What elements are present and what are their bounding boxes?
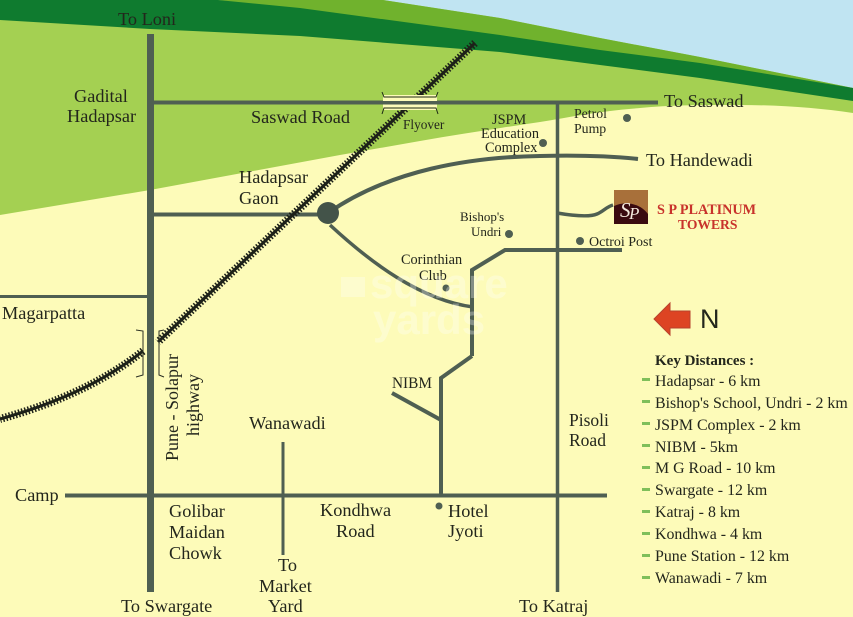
highway label: highway bbox=[183, 374, 203, 436]
place labels: Jyoti bbox=[448, 521, 484, 541]
place labels: Yard bbox=[268, 596, 303, 616]
road network bbox=[0, 34, 658, 592]
key distances list: JSPM Complex - 2 km bbox=[655, 417, 801, 434]
project name bbox=[657, 202, 756, 232]
key distances list: NIBM - 5km bbox=[655, 439, 739, 456]
key distances heading: Key Distances : bbox=[655, 353, 754, 369]
key distances list: Kondhwa - 4 km bbox=[655, 526, 763, 543]
junction: Hadapsar Gaon bbox=[317, 202, 339, 224]
place labels: Gaon bbox=[239, 188, 279, 208]
place labels: To bbox=[278, 555, 297, 575]
place labels: To Handewadi bbox=[646, 150, 753, 170]
place labels: Market bbox=[259, 576, 312, 596]
place labels: To Katraj bbox=[519, 596, 588, 616]
place labels: To Loni bbox=[118, 9, 176, 29]
small landmark labels: NIBM bbox=[392, 375, 432, 392]
watermark bbox=[341, 260, 508, 343]
place labels: Hadapsar bbox=[239, 167, 308, 187]
background: sky bbox=[383, 0, 853, 88]
key distances list: Katraj - 8 km bbox=[655, 504, 741, 521]
place labels: To Saswad bbox=[664, 91, 743, 111]
small landmark labels: Education bbox=[481, 126, 539, 142]
place labels: Magarpatta bbox=[2, 303, 85, 323]
small landmark labels: Corinthian bbox=[401, 252, 462, 268]
place labels: Wanawadi bbox=[249, 413, 326, 433]
small landmark labels: Petrol bbox=[574, 106, 607, 121]
watermark: square bbox=[370, 260, 508, 307]
logo: S P Platinum bbox=[614, 190, 648, 224]
place labels: Road bbox=[569, 430, 606, 450]
place labels: Gadital bbox=[74, 86, 128, 106]
north arrow: N bbox=[700, 304, 720, 334]
place labels: Hotel bbox=[448, 501, 489, 521]
key distances list bbox=[655, 373, 848, 587]
small landmark labels: Octroi Post bbox=[589, 235, 652, 250]
highway label bbox=[162, 354, 203, 461]
place labels: To Swargate bbox=[121, 596, 212, 616]
background: mid green strip bbox=[218, 0, 853, 95]
key distances list: M G Road - 10 km bbox=[655, 460, 776, 477]
background: dark green band bbox=[0, 0, 853, 101]
small landmark labels bbox=[392, 106, 652, 392]
place labels: Camp bbox=[15, 485, 59, 505]
place labels: Saswad Road bbox=[251, 107, 350, 127]
background: light green hill bbox=[0, 0, 853, 215]
small landmark labels: Bishop's bbox=[460, 209, 504, 224]
place labels: Maidan bbox=[169, 522, 225, 542]
place labels: Hadapsar bbox=[67, 106, 136, 126]
small landmark labels: Undri bbox=[471, 224, 502, 239]
key distances list: Wanawadi - 7 km bbox=[655, 570, 768, 587]
logo: S P Platinum: P bbox=[628, 204, 639, 223]
rail underpass brackets bbox=[136, 330, 164, 377]
list bullets bbox=[642, 378, 650, 579]
place labels: Golibar bbox=[169, 501, 225, 521]
place labels: Pisoli bbox=[569, 410, 609, 430]
watermark: yards bbox=[373, 296, 485, 343]
railway line bbox=[0, 43, 475, 419]
flyover bbox=[382, 92, 438, 114]
key distances list: Hadapsar - 6 km bbox=[655, 373, 761, 390]
key distances panel bbox=[642, 353, 848, 587]
small landmark labels: JSPM bbox=[492, 112, 526, 128]
small landmark labels: Pump bbox=[574, 121, 606, 136]
key distances list: Pune Station - 12 km bbox=[655, 548, 790, 565]
small landmark labels: Club bbox=[419, 268, 447, 284]
place labels: Road bbox=[336, 521, 375, 541]
project name: TOWERS bbox=[678, 217, 737, 232]
place labels: Kondhwa bbox=[320, 500, 391, 520]
project name: S P PLATINUM bbox=[657, 202, 756, 218]
highway label: Pune - Solapur bbox=[162, 354, 182, 461]
north arrow bbox=[654, 303, 720, 335]
key distances list: Bishop's School, Undri - 2 km bbox=[655, 395, 848, 412]
place labels: Chowk bbox=[169, 543, 223, 563]
flyover label: Flyover bbox=[403, 117, 445, 132]
landmark markers bbox=[436, 114, 631, 510]
small landmark labels: Complex bbox=[485, 140, 537, 156]
logo: S P Platinum: S bbox=[620, 198, 631, 222]
key distances list: Swargate - 12 km bbox=[655, 482, 768, 499]
